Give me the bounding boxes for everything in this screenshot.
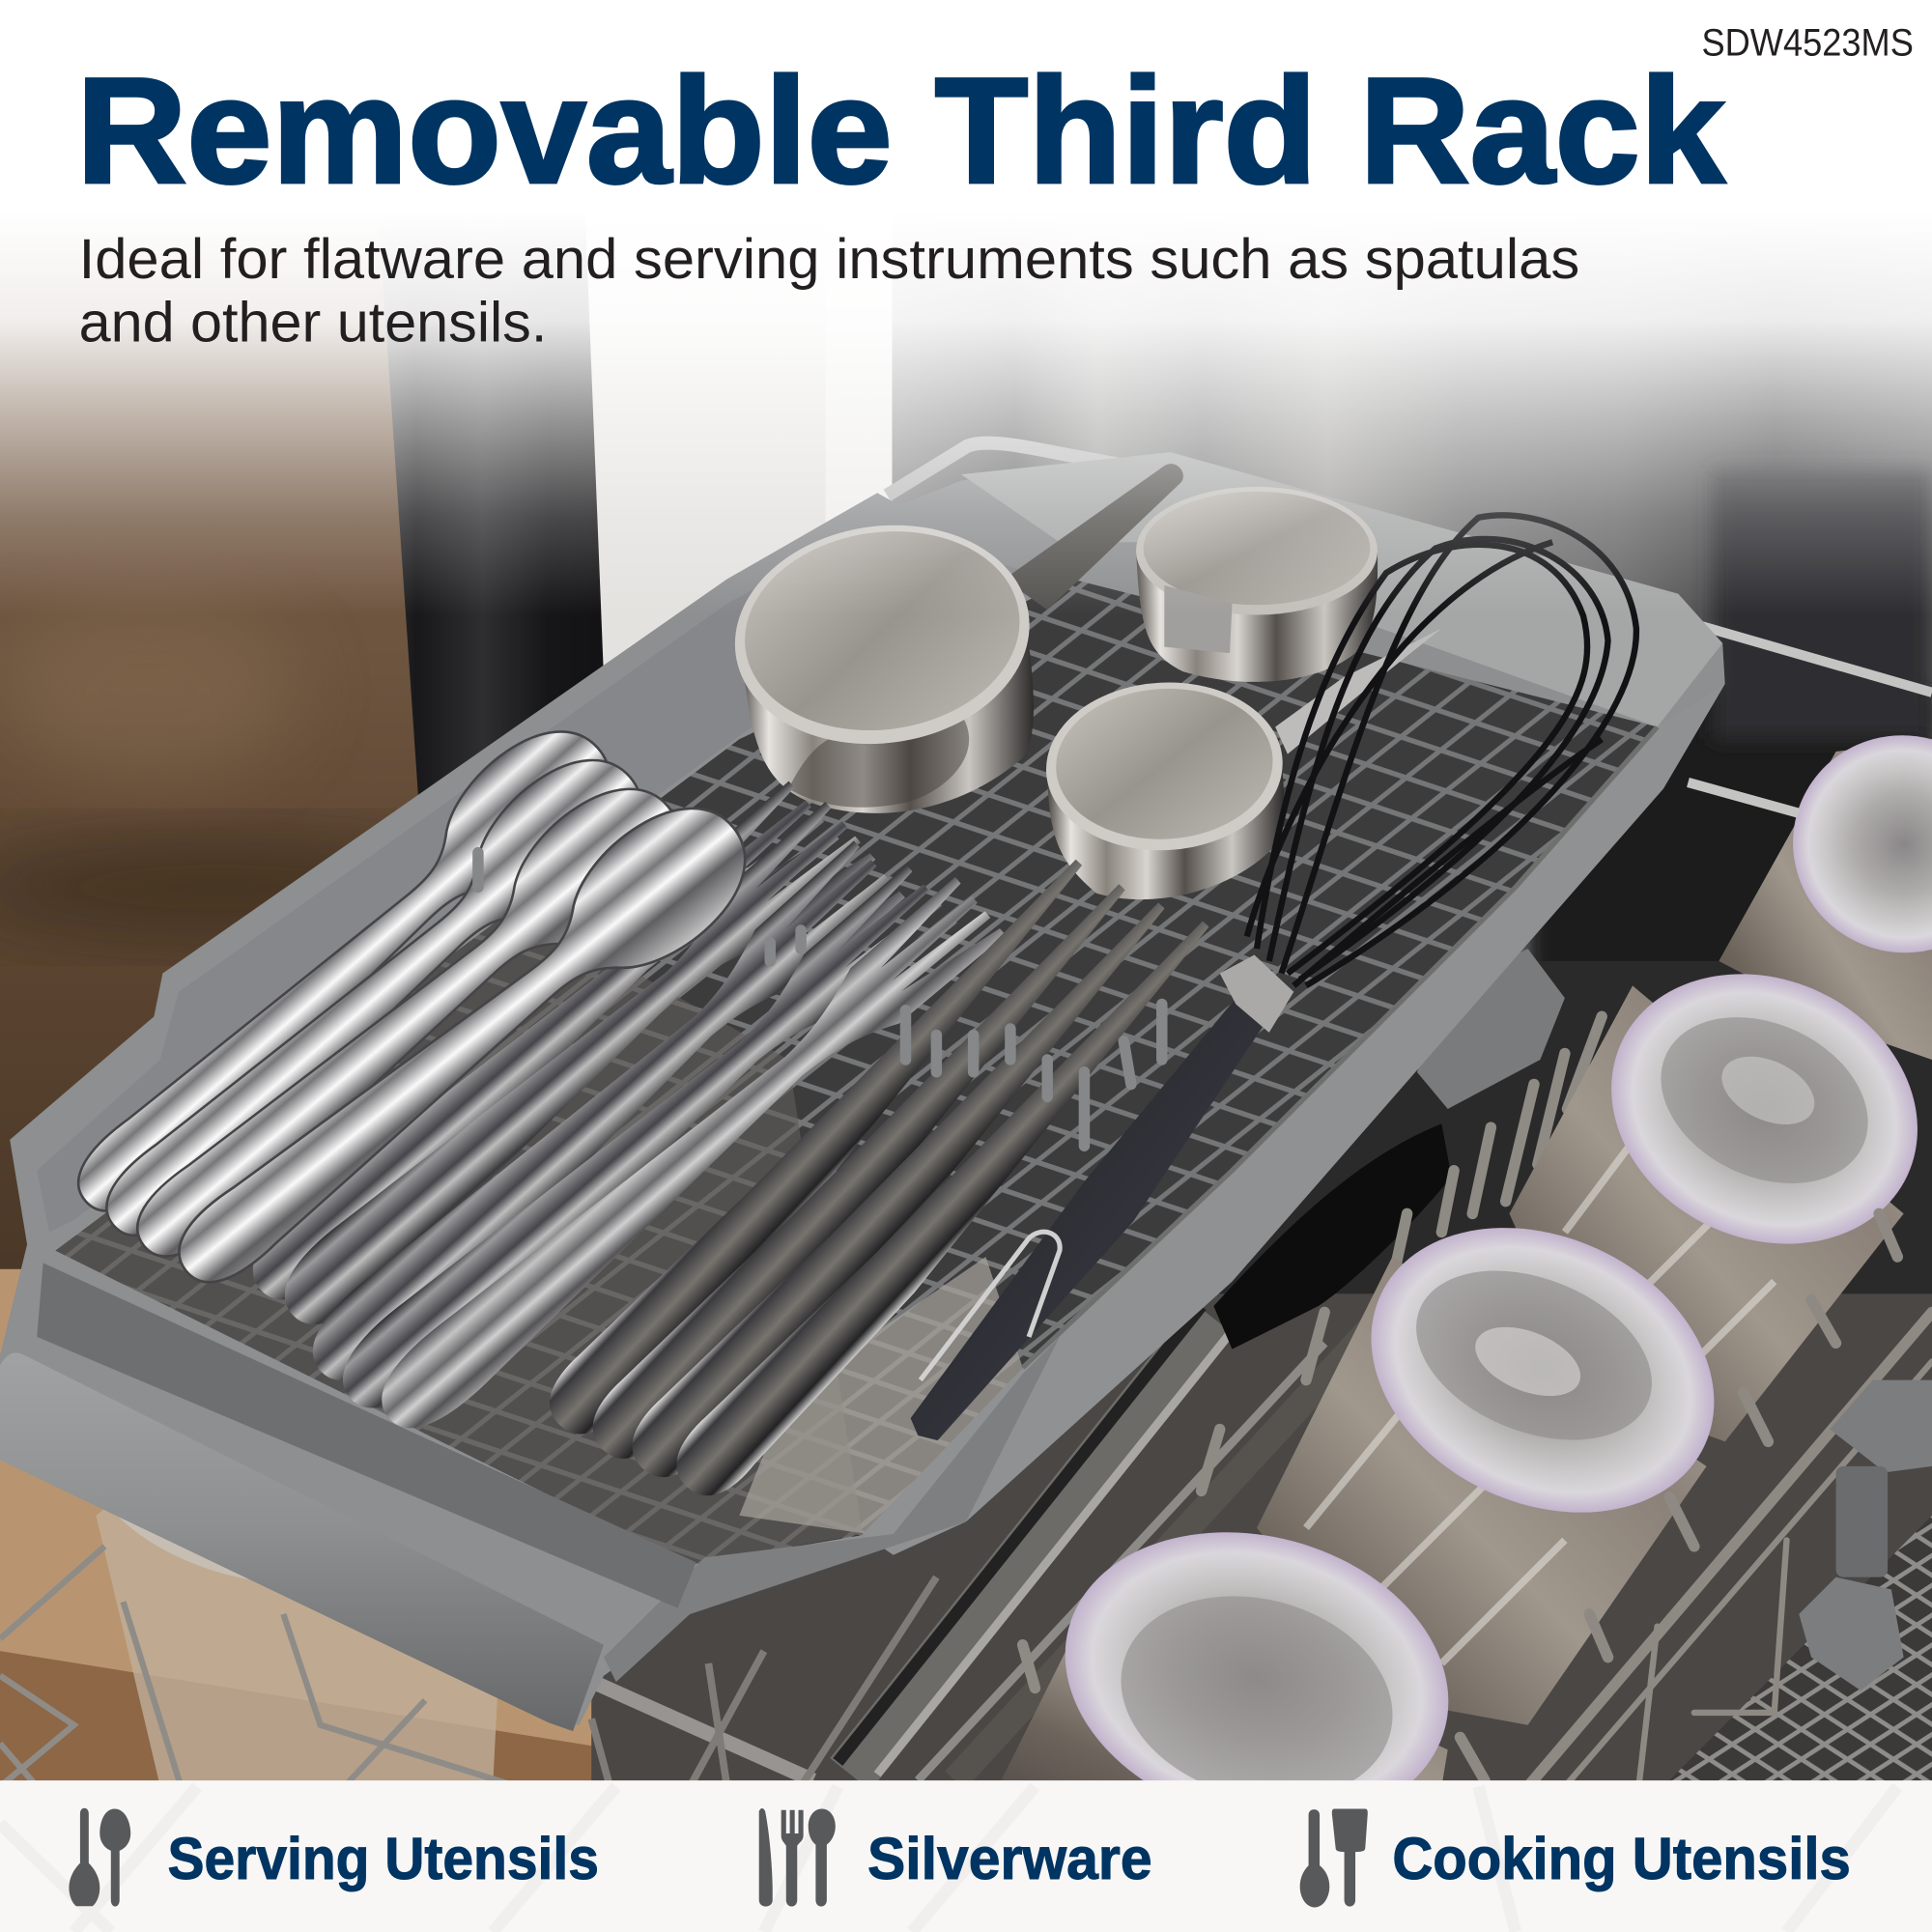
spoons xyxy=(46,703,773,1320)
label: serving utensils: Serving Utensils xyxy=(167,1826,599,1891)
whisk wires xyxy=(1247,515,1636,985)
measuring cup handle rear xyxy=(1005,464,1183,610)
right wall rim xyxy=(863,684,1725,1555)
forks xyxy=(236,781,1006,1448)
glass tumbler 3 xyxy=(1257,1174,1761,1725)
glass tumbler 1, top right xyxy=(1719,706,1932,1060)
soft top white fade xyxy=(0,0,1932,616)
whisk handle xyxy=(911,998,1265,1440)
subtitle: Ideal for flatware and serving instruments such as spatulas xyxy=(79,228,1579,291)
whisk hanging loop xyxy=(921,1232,1060,1380)
tray rear lighter rim xyxy=(961,452,1722,727)
measuring cup large xyxy=(721,506,1043,813)
lower rack with tall clear glass at left xyxy=(0,1378,936,1799)
rack pegs xyxy=(478,853,1162,1146)
wood cabinet backdrop xyxy=(0,0,443,1293)
inner front bar xyxy=(37,1263,696,1608)
white door frame xyxy=(577,0,863,985)
title: Removable Third Rack xyxy=(76,46,1725,214)
stainless tub back wall xyxy=(890,0,1932,985)
tray rack floor xyxy=(55,579,1658,1565)
measuring cup front xyxy=(1042,629,1441,899)
tray handle loop xyxy=(887,443,1244,496)
third rack tray xyxy=(0,443,1725,1731)
glass tumbler 4 xyxy=(998,1491,1482,1865)
model number: SDW4523MS xyxy=(1701,21,1914,64)
tray outer shell xyxy=(0,452,1725,1725)
subtitle: and other utensils. xyxy=(79,291,547,354)
spray arm fitting xyxy=(1417,949,1565,1109)
whisk xyxy=(911,515,1636,1440)
whisk collar xyxy=(1220,955,1293,1033)
lower tub interior xyxy=(591,1293,1932,1799)
bottom feature band xyxy=(0,1780,1932,1932)
knives xyxy=(535,841,1235,1510)
bottom rack side rail with tines xyxy=(1460,1213,1932,1786)
inner left wall xyxy=(37,529,1060,1233)
label: cooking utensils: Cooking Utensils xyxy=(1392,1826,1851,1891)
black spatula behind third rack xyxy=(1213,1123,1452,1350)
icon: silverware xyxy=(759,1808,836,1907)
rack adjuster wheels xyxy=(1799,1380,1932,1690)
dark dishwasher door edge xyxy=(363,0,629,985)
subtitle xyxy=(79,228,1579,354)
icon: cooking utensils xyxy=(1300,1808,1368,1907)
glass tumbler 2 xyxy=(1509,925,1932,1441)
icon: serving utensils xyxy=(69,1808,130,1907)
rear rack rails xyxy=(1688,622,1932,813)
lower tray fascia xyxy=(604,1337,1060,1682)
tan floor lower left xyxy=(0,1269,640,1786)
lower rack tines behind glasses xyxy=(1023,1016,1602,1688)
label: silverware: Silverware xyxy=(867,1826,1152,1891)
flatware rack below third rack xyxy=(838,1306,1380,1780)
measuring cup back right xyxy=(1136,487,1378,682)
front handle xyxy=(0,1353,604,1731)
translucent band background xyxy=(0,1780,1932,1932)
